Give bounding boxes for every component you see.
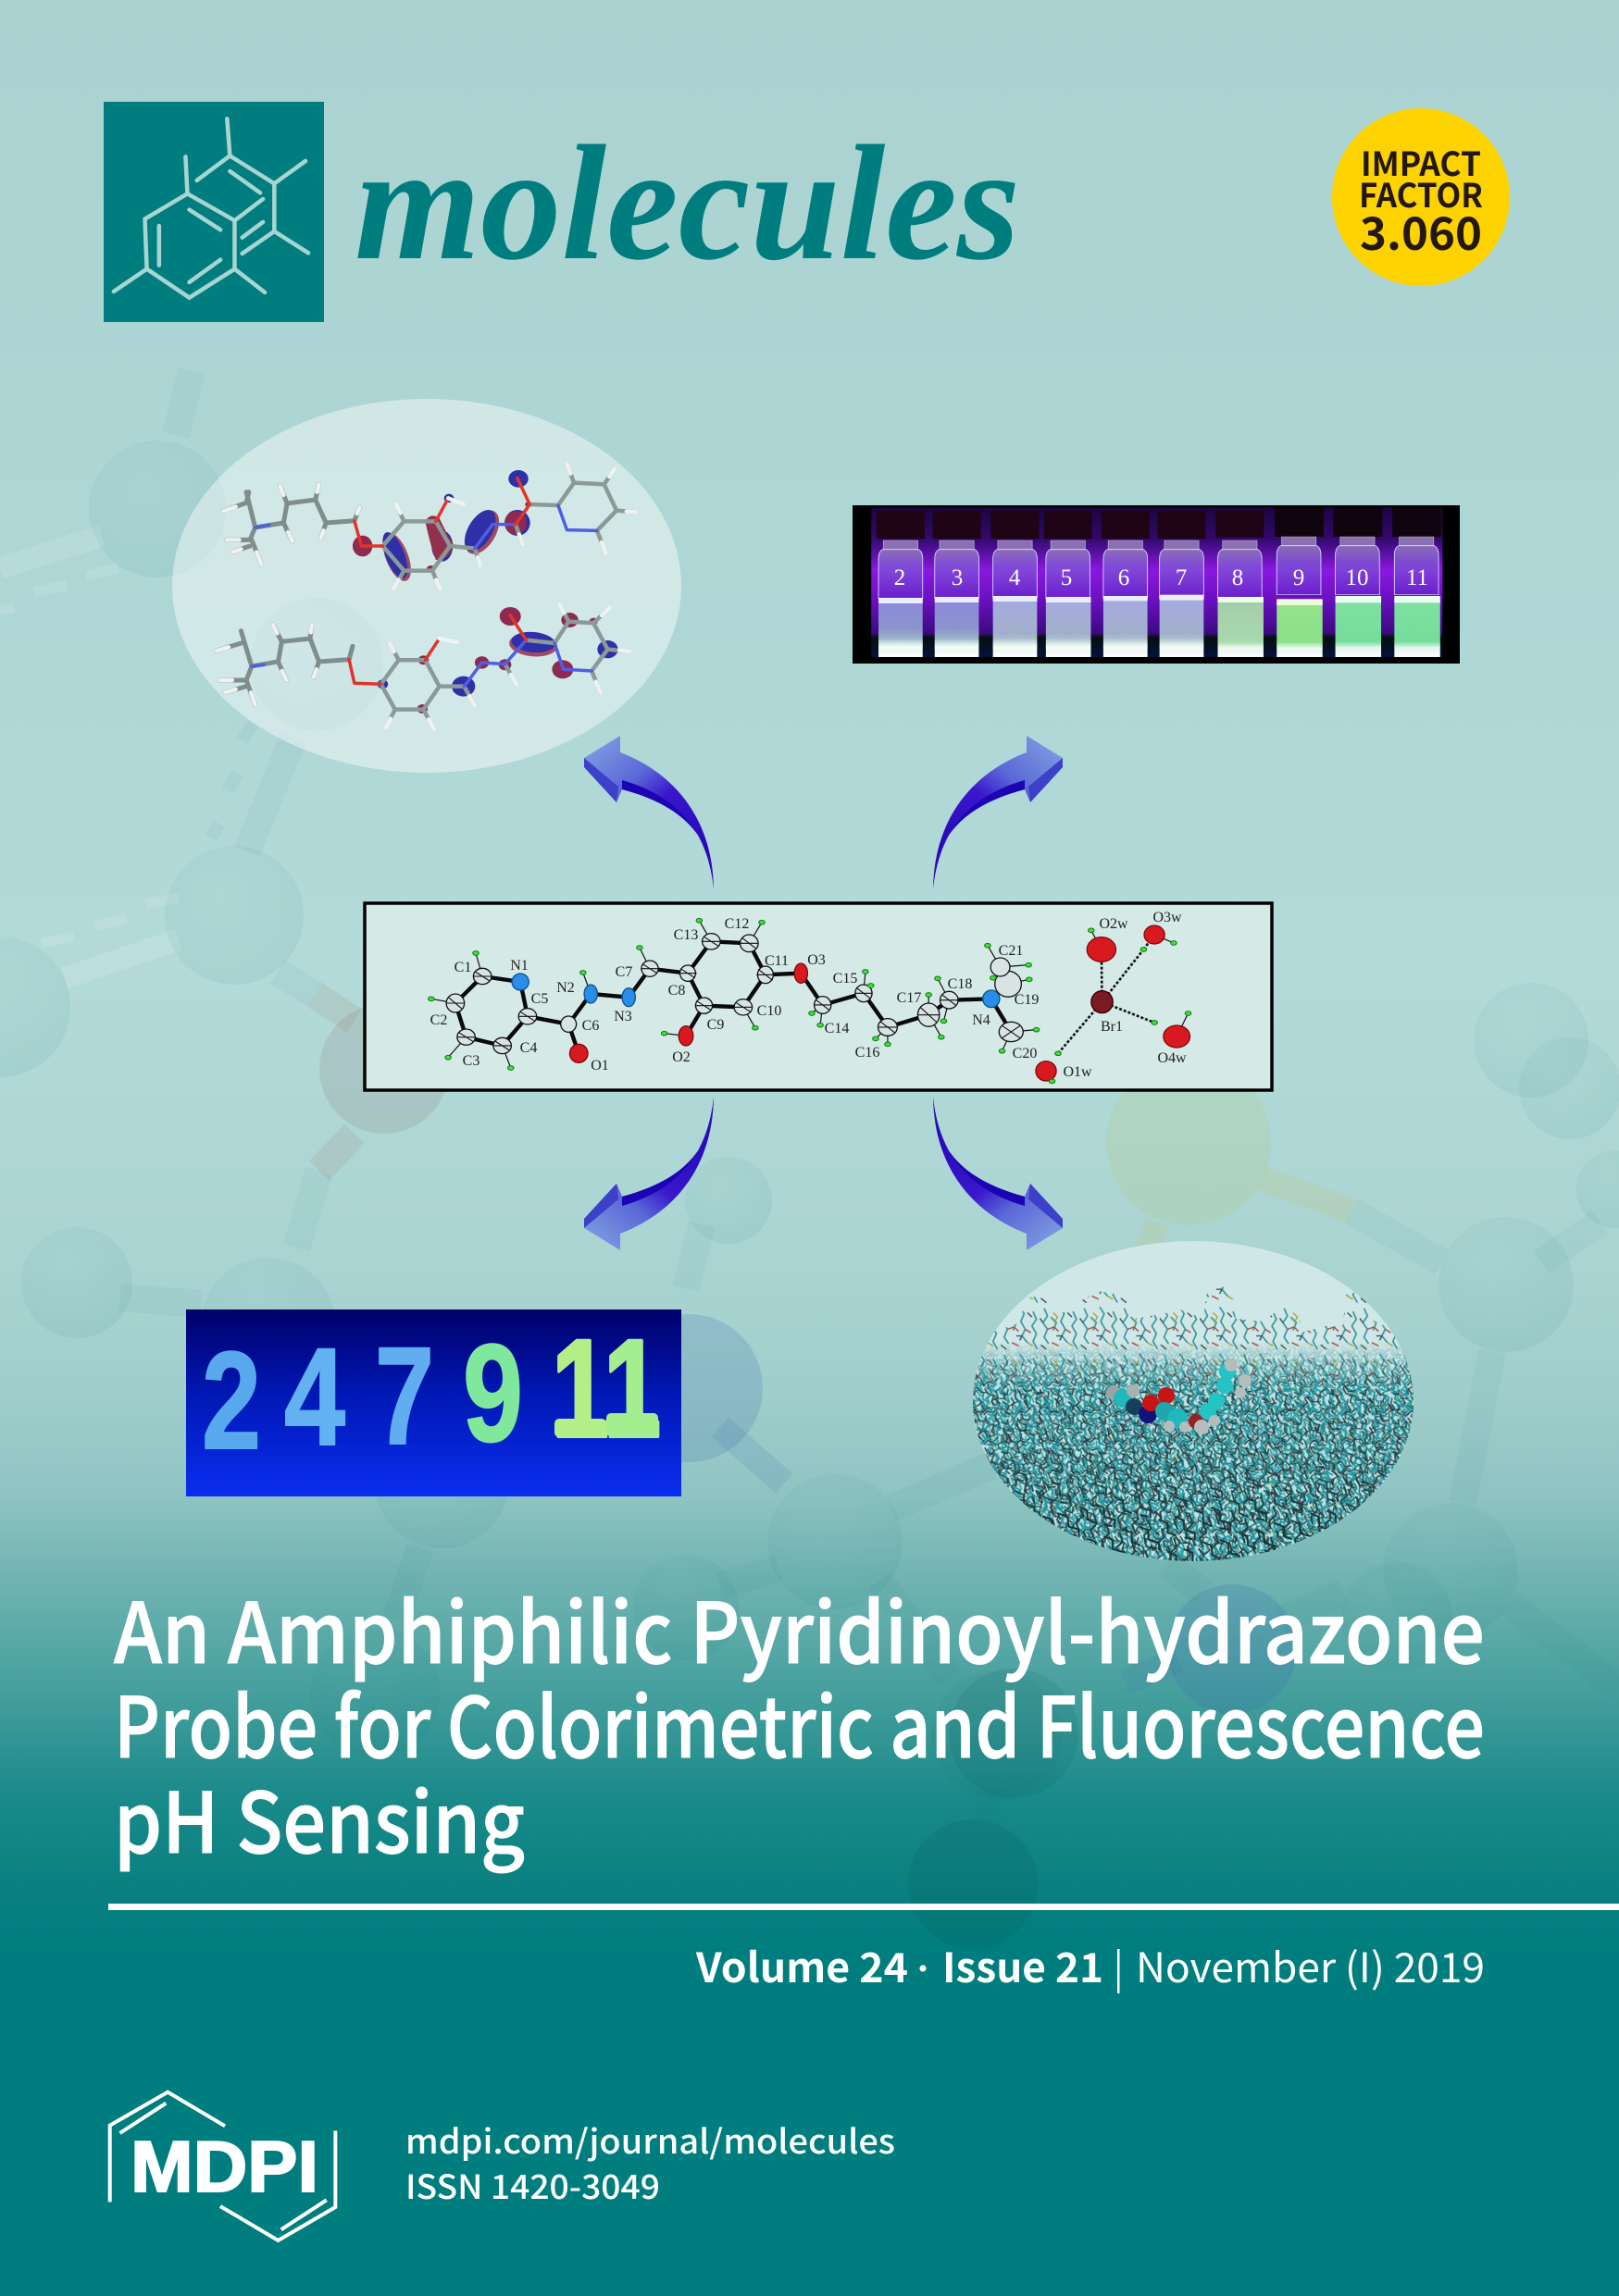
atom labels: O1: [591, 1058, 609, 1074]
panel: fluorescent digits photo: 9: [463, 1315, 523, 1471]
arrow: top left: [584, 736, 714, 889]
background ghost molecule: [0, 202, 1619, 1949]
atom labels: N1: [510, 958, 529, 974]
vial 11: [1392, 507, 1441, 657]
divider rule: [108, 1904, 1619, 1910]
vial numbers: 10: [1346, 565, 1368, 590]
journal title: molecules: [355, 111, 1020, 294]
journal url and ISSN: ISSN 1420-3049: [405, 2161, 660, 2209]
orbital lobes behind lower molecule: [378, 607, 618, 714]
orbital lobes behind upper molecule: [353, 470, 530, 584]
atom labels: O3: [807, 952, 826, 968]
arrow: top right: [933, 736, 1063, 889]
vial 8: [1215, 511, 1264, 657]
vial numbers: 2: [894, 565, 905, 590]
atom labels: Br1: [1101, 1019, 1123, 1035]
panel: fluorescent digits photo: 4: [284, 1319, 345, 1474]
atom labels: C13: [674, 927, 698, 943]
article title: An Amphiphilic Pyridinoyl-hydrazone: [114, 1567, 1485, 1687]
atom labels: C8: [668, 983, 685, 999]
atom labels: C15: [833, 971, 857, 987]
atom labels: C4: [520, 1040, 537, 1056]
lipid tails: [973, 1344, 1414, 1561]
darker lower tails: [973, 1384, 1413, 1561]
bonds: [455, 941, 1011, 1053]
vial numbers: 8: [1232, 565, 1243, 590]
panel: fluorescent digits photo: 1: [604, 1310, 661, 1466]
atom labels: C6: [582, 1018, 599, 1034]
panel: crystal structure: [365, 903, 1272, 1090]
atom labels: C5: [531, 991, 548, 1007]
impact factor badge: [1332, 108, 1510, 286]
atom labels: C1: [455, 960, 471, 975]
journal url and ISSN: mdpi.com/journal/molecules: [405, 2116, 895, 2164]
atoms: [446, 934, 1023, 1054]
atom labels: C19: [1015, 992, 1039, 1008]
atom labels: O2w: [1099, 916, 1128, 932]
atom labels: C2: [430, 1012, 447, 1028]
journal logo square: [104, 102, 324, 322]
volume and issue line: Issue 21: [942, 1935, 1103, 1994]
atom labels: C3: [463, 1053, 479, 1069]
atom labels: C16: [855, 1045, 879, 1061]
vial numbers: 7: [1176, 565, 1187, 590]
article title: [114, 1567, 1485, 1877]
impact factor badge: 3.060: [1360, 198, 1482, 264]
vial 10: [1333, 507, 1382, 657]
vial 7: [1157, 511, 1205, 657]
atom labels: C9: [707, 1017, 724, 1033]
vial numbers: 5: [1061, 565, 1072, 590]
vial numbers: 4: [1009, 565, 1021, 590]
panel: fluorescent digits photo: 2: [202, 1322, 261, 1478]
vial numbers: 9: [1293, 565, 1304, 590]
atom labels: C11: [765, 953, 789, 969]
panel: membrane simulation: [973, 1241, 1414, 1561]
atom labels: C21: [999, 943, 1023, 959]
panel: fluorescent digits photo: [186, 1309, 681, 1496]
atom labels: C17: [897, 990, 921, 1006]
vial 9: [1275, 507, 1324, 657]
impact factor badge: IMPACT: [1361, 138, 1481, 186]
impact factor badge: FACTOR: [1359, 169, 1483, 217]
vial 6: [1102, 511, 1150, 657]
volume and issue line: Volume 24: [695, 1935, 908, 1994]
atom labels: O1w: [1063, 1064, 1092, 1080]
vial 5: [1044, 511, 1092, 657]
panel: fluorescent digits photo: 1: [552, 1310, 609, 1466]
volume and issue line: November (I) 2019: [1136, 1935, 1485, 1994]
vial 2: [877, 511, 925, 657]
journal url and ISSN: [405, 2116, 895, 2209]
vial 4: [990, 511, 1040, 657]
volume and issue line: [695, 1935, 1485, 1994]
atom labels: C18: [948, 976, 972, 992]
panel: vials photo: [853, 505, 1460, 664]
vial numbers: 11: [1406, 565, 1428, 590]
panel: fluorescent digits photo: 7: [375, 1318, 434, 1473]
atom labels: [430, 910, 1187, 1080]
atom labels: O4w: [1157, 1050, 1187, 1066]
atom labels: N4: [972, 1012, 990, 1028]
article title: pH Sensing: [114, 1756, 525, 1877]
vial numbers: [894, 565, 1428, 590]
MDPI logo: MDPI: [131, 2126, 318, 2207]
arrow: bottom left: [584, 1097, 714, 1250]
atom labels: C12: [725, 916, 749, 932]
atom labels: C20: [1013, 1046, 1037, 1061]
embedded probe spheres: [1106, 1359, 1252, 1434]
atom labels: N3: [614, 1009, 632, 1024]
atom labels: N2: [556, 980, 575, 996]
vial 3: [933, 511, 981, 657]
atom labels: O2: [672, 1049, 691, 1065]
atom labels: C14: [825, 1021, 849, 1036]
arrow: bottom right: [933, 1097, 1063, 1250]
lipid head groups: [973, 1286, 1414, 1561]
vial numbers: 6: [1118, 565, 1129, 590]
panel: orbital ellipse: [172, 399, 681, 773]
atom labels: C10: [757, 1003, 781, 1019]
lower molecule bonds: [217, 604, 630, 729]
vial numbers: 3: [952, 565, 963, 590]
upper molecule bonds: [223, 465, 636, 590]
MDPI logo: [110, 2092, 335, 2240]
atom labels: O3w: [1152, 910, 1182, 925]
atom labels: C7: [616, 964, 632, 980]
